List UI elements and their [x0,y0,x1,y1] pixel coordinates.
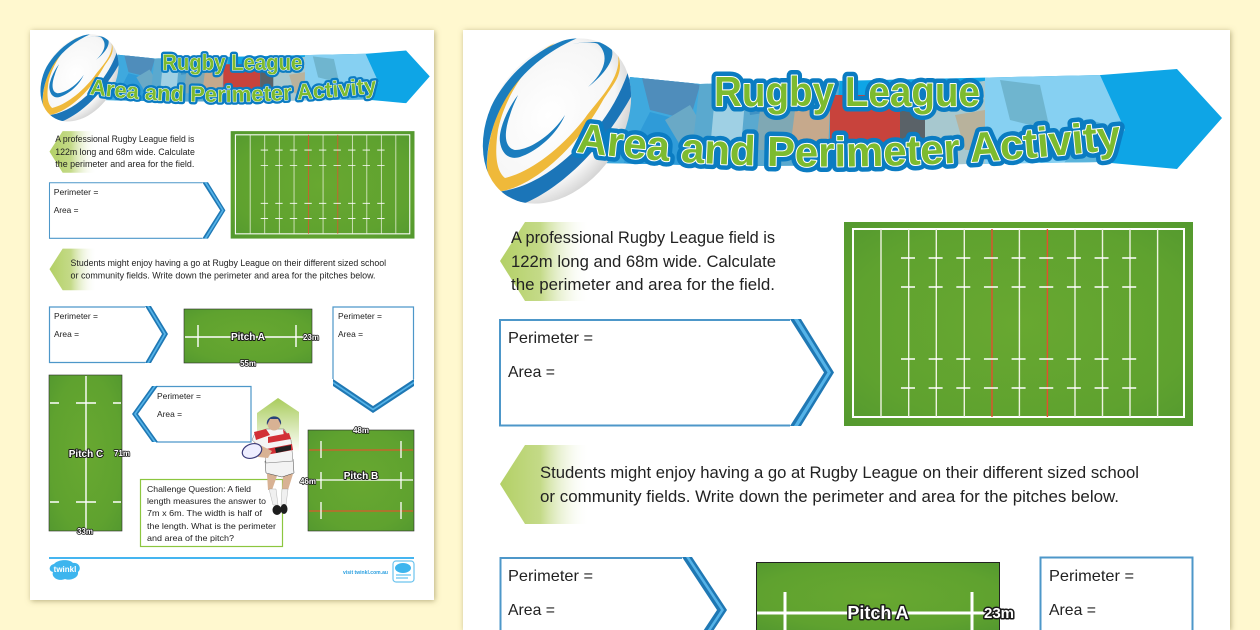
pitch A diagram: 23m [984,605,1014,622]
small answer box A: Area = [54,329,79,339]
small pitch C: 71m [114,449,130,458]
instructions text with green arrow: or community fields. Write down the perimeter and area for the pitches below. [540,487,1119,506]
answer box: pitch A [500,557,727,630]
small challenge question: and area of the pitch? [147,533,234,543]
title: Rugby League [714,68,980,115]
icon: rugby player [240,398,299,515]
small answer box B shield: Perimeter = [338,311,382,321]
small answer box B shield [333,307,414,413]
intro text with green arrow: A professional Rugby League field is [511,228,775,247]
small page top section [40,34,430,290]
intro text with green arrow [500,222,776,301]
footer url: visit twinkl.com.au [343,570,389,576]
answer box: pitch A: Perimeter = [508,568,593,585]
banner [606,69,1222,169]
small banner [106,50,430,104]
pitch A diagram [756,562,1014,630]
answer box: field: Perimeter = [508,330,593,347]
answer box: pitch B: Area = [1049,602,1096,619]
answer box: field [500,319,834,426]
small title: Rugby League [162,50,302,75]
pitch A diagram: Pitch A [847,603,909,623]
small pitch A: 55m [240,359,256,368]
small challenge question: Challenge Question: A field [147,484,251,494]
small title: Rugby League [162,50,302,75]
small answer box A [50,306,168,363]
instructions text with green arrow [500,445,1139,524]
small field [231,131,414,239]
small pitch B: 48m [353,426,369,435]
answer box: pitch B: Perimeter = [1049,568,1134,585]
panel: small worksheet preview [27,27,439,605]
small challenge question: length measures the answer to [147,496,266,506]
small pitch C: 33m [77,527,93,536]
small pitch C [49,375,130,536]
small answer box C left arrow [132,386,251,442]
title [571,68,1125,172]
small challenge question [140,480,282,546]
small pitch B: 46m [300,477,316,486]
panel: large worksheet preview [460,27,1235,630]
small ball [40,34,119,122]
small intro: A professional Rugby League field is [55,134,195,144]
small title [87,50,378,105]
small pitch C: Pitch C [69,449,103,460]
small answer box: Perimeter = [54,187,99,197]
title: Area and Perimeter Activity [571,117,1125,172]
answer box: field: Area = [508,364,555,381]
small answer box C left arrow: Perimeter = [157,391,201,401]
small intro: the perimeter and area for the field. [55,159,194,169]
small pitch B: Pitch B [344,471,378,482]
small challenge question: 7m x 6m. The width is half of [147,508,263,518]
small answer box C left arrow: Area = [157,409,182,419]
small pitch A [184,309,319,368]
large page sheet [463,30,1230,630]
icon: rugby ball [482,38,632,204]
quality badge [393,561,414,582]
instructions text with green arrow: Students might enjoy having a go at Rugby League on their different sized school [540,463,1139,482]
rugby field diagram [844,222,1193,426]
answer box: pitch B [1040,558,1192,630]
small answer box [49,182,225,239]
twinkl logo: twinkl [54,565,76,574]
intro text with green arrow: 122m long and 68m wide. Calculate [511,252,776,271]
small title: Area and Perimeter Activity [87,76,378,105]
small intro [49,131,195,173]
answer box: pitch A: Area = [508,602,555,619]
title: Rugby League [714,68,980,115]
small answer box A: Perimeter = [54,311,98,321]
small answer box B shield: Area = [338,329,363,339]
twinkl logo [50,560,80,580]
small pitch B [300,426,414,531]
small pitch A: Pitch A [231,332,265,343]
small instructions [49,249,386,290]
small title: Area and Perimeter Activity [90,78,376,102]
small pitch A: 23m [303,333,319,342]
small answer box: Area = [54,205,79,215]
title: Area and Perimeter Activity [576,122,1120,168]
intro text with green arrow: the perimeter and area for the field. [511,275,775,294]
small instructions: or community fields. Write down the perimeter and area for the pitches below. [71,271,376,281]
small page sheet [30,30,434,600]
small instructions: Students might enjoy having a go at Rugby League on their different sized school [71,258,386,268]
footer rule [49,557,414,559]
small intro: 122m long and 68m wide. Calculate [55,147,195,157]
small challenge question: the length. What is the perimeter [147,521,276,531]
